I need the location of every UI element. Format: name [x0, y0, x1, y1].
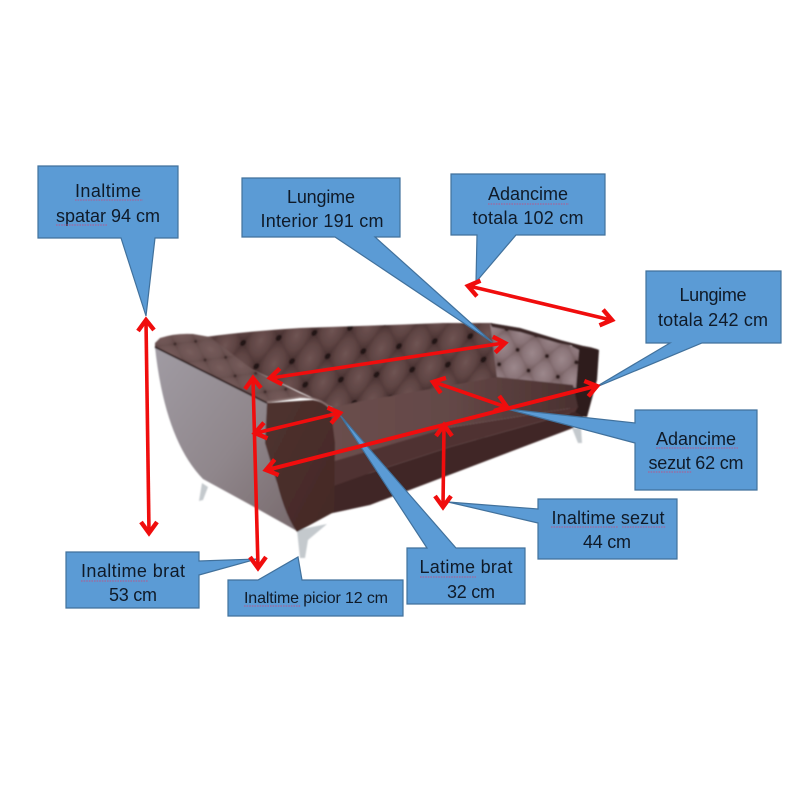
right armrest outer edge [570, 345, 599, 417]
seat cushion top [328, 377, 578, 463]
arrow: arm height [245, 378, 266, 568]
callout: Inaltime spatar: Inaltime [75, 181, 141, 201]
arrow: interior length [270, 337, 505, 384]
callout: Inaltime sezut: Inaltime sezut [552, 508, 664, 528]
callout: Adancime sezut [507, 409, 757, 490]
callout: Adancime totala: Adancime [488, 184, 568, 204]
seat cushion front [328, 407, 578, 488]
callout: Latime brat [340, 415, 525, 604]
arrow: total depth [468, 281, 612, 325]
callout: Lungime Interior [242, 178, 492, 342]
left arm piping [155, 347, 267, 403]
callout: Adancime sezut: sezut 62 cm [648, 453, 744, 473]
arrow: arm width [255, 408, 340, 438]
callout: Inaltime spatar [38, 166, 178, 316]
tufted backrest [205, 323, 498, 410]
sofa legs [199, 428, 582, 558]
callout: Latime brat: Latime brat [420, 557, 512, 577]
arrow: seat depth [433, 378, 507, 411]
callout: Lungime totala: totala 242 cm [658, 310, 768, 330]
left side panel [155, 347, 297, 531]
right armrest inner face [490, 323, 579, 388]
callout: Latime brat: 32 cm [447, 582, 495, 602]
callout: Lungime totala [594, 271, 781, 388]
callout: Adancime sezut: Adancime [656, 429, 736, 449]
arrow: back height [138, 320, 157, 533]
callout: Inaltime brat [66, 552, 257, 608]
sofa photo [155, 323, 599, 558]
callout: Inaltime picior: Inaltime picior 12 cm [244, 590, 388, 607]
callout: Lungime Interior: Lungime [287, 187, 355, 207]
left arm front [265, 400, 335, 532]
callout: Lungime Interior: Interior 191 cm [260, 211, 384, 231]
left arm front highlight [267, 397, 331, 409]
callout: Lungime totala: Lungime [680, 285, 746, 305]
callout: Inaltime brat: Inaltime brat [81, 561, 185, 581]
callout: Inaltime sezut [448, 499, 677, 559]
callout: Inaltime spatar: spatar 94 cm [56, 206, 160, 226]
arrow: total length [266, 381, 597, 475]
callout: Inaltime picior [228, 557, 403, 616]
callout: Adancime totala [451, 174, 605, 282]
arrow: seat height [435, 425, 452, 507]
callout: Inaltime brat: 53 cm [109, 585, 157, 605]
left arm top [155, 334, 328, 405]
callout: Adancime totala: totala 102 cm [472, 208, 584, 228]
right armrest top edge [490, 323, 599, 350]
sofa base [328, 412, 583, 514]
callout: Inaltime sezut: 44 cm [583, 532, 631, 552]
